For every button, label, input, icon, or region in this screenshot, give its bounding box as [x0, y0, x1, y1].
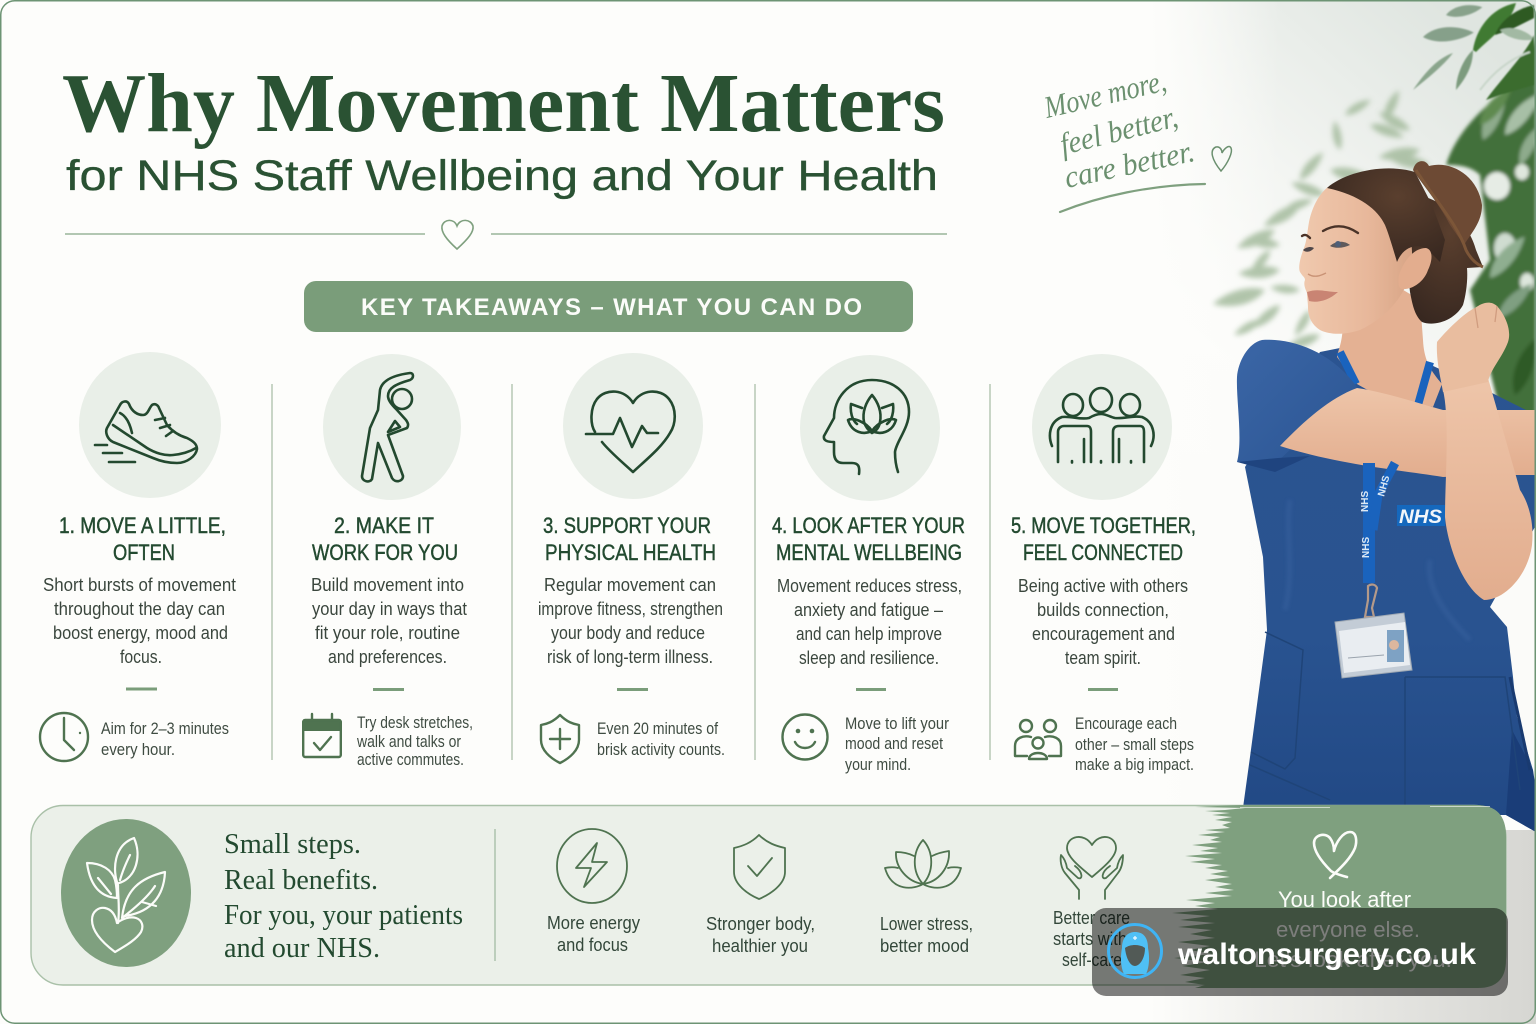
- body text: throughout the day can: [54, 599, 225, 619]
- heading: 4. LOOK AFTER YOUR: [772, 513, 965, 538]
- body text: team spirit.: [1065, 648, 1141, 668]
- tip text: Try desk stretches,: [357, 714, 473, 732]
- benefit: better care: starts with: [1053, 929, 1127, 949]
- lower lanyard and NHS strap text: NHS: [1376, 474, 1392, 498]
- tip text: Move to lift your: [845, 715, 949, 733]
- icon: heart growing leaves: [61, 819, 191, 967]
- icon: head with lotus: [800, 355, 940, 501]
- tip text: [101, 720, 229, 759]
- heading: [312, 513, 458, 565]
- tip text: [845, 715, 949, 774]
- photo background: soft wash and plants: [1150, 0, 1536, 810]
- NHS chest logo: NHS: [1399, 507, 1442, 528]
- icon: stretching figure: [323, 354, 461, 500]
- heading: MENTAL WELLBEING: [776, 540, 962, 565]
- heading: OFTEN: [113, 540, 175, 565]
- heading: FEEL CONNECTED: [1023, 540, 1183, 565]
- tip text: active commutes.: [357, 751, 464, 769]
- bottom-right grey wash: [1150, 830, 1536, 1024]
- body text: Regular movement can: [544, 575, 716, 595]
- title: Why Movement Matters: [62, 57, 945, 150]
- body text: improve fitness, strengthen: [538, 599, 723, 619]
- watermark badge: [1092, 908, 1508, 996]
- icon: heart with pulse: [563, 353, 703, 499]
- body text: focus.: [120, 647, 162, 667]
- benefit: lower stress: Lower stress,: [880, 914, 973, 934]
- benefit: stronger body: healthier you: [712, 936, 808, 956]
- panel: takeaway 2: [303, 354, 473, 769]
- tagline: Real benefits.: [224, 864, 378, 896]
- panel: takeaway 3: [538, 353, 725, 763]
- icon: calendar: [303, 714, 341, 757]
- ID badge and clip: [1335, 585, 1412, 678]
- hair back and bun: [1400, 195, 1483, 324]
- panel: takeaway 5: [1011, 354, 1196, 774]
- subtitle: for NHS Staff Wellbeing and Your Health: [66, 153, 938, 200]
- panel: takeaway 4: [772, 355, 965, 774]
- benefit: better care: [1053, 837, 1130, 970]
- icon: supportive group: [1015, 720, 1061, 759]
- body text: Short bursts of movement: [43, 575, 236, 595]
- body text: [1018, 576, 1188, 668]
- body text: [43, 575, 236, 667]
- body text: Movement reduces stress,: [777, 576, 962, 596]
- neck: [1337, 285, 1442, 407]
- benefit: better care: Better care: [1053, 908, 1130, 928]
- banner: key takeaways: [304, 281, 913, 332]
- ear: [1398, 248, 1432, 289]
- icon: three people: [1032, 354, 1172, 500]
- lower lanyard and NHS strap text: NHS: [1361, 537, 1372, 558]
- heading: [1011, 513, 1196, 565]
- tip text: [597, 720, 725, 759]
- handwritten note: care better.: [1061, 133, 1198, 195]
- body text: your day in ways that: [312, 599, 467, 619]
- tip text: Even 20 minutes of: [597, 720, 718, 738]
- column dividers: [272, 384, 990, 760]
- body text: and can help improve: [796, 624, 942, 644]
- benefit: lower stress: better mood: [880, 936, 969, 956]
- tip text: make a big impact.: [1075, 756, 1194, 774]
- body text: Build movement into: [311, 575, 464, 595]
- hair front and bun: [1327, 168, 1445, 262]
- brush panel: you look after everyone else: everyone else.: [1276, 917, 1420, 942]
- benefit: stronger body: Stronger body,: [706, 914, 815, 934]
- benefit: lower stress: [880, 840, 973, 956]
- lower lanyard and NHS strap text: NHS: [1360, 491, 1371, 512]
- handwritten note: Move more,: [1040, 63, 1169, 125]
- handwritten note: [1040, 63, 1231, 212]
- heading: 3. SUPPORT YOUR: [543, 513, 711, 538]
- forearm and elbow: [1443, 378, 1532, 600]
- brush panel: you look after everyone else: [1172, 805, 1506, 988]
- heading: [543, 513, 716, 565]
- body text: encouragement and: [1032, 624, 1175, 644]
- body text: your body and reduce: [551, 623, 705, 643]
- body text: sleep and resilience.: [799, 648, 939, 668]
- body text: risk of long-term illness.: [547, 647, 713, 667]
- photo: nurse stretching: [1237, 161, 1536, 832]
- tip text: mood and reset: [845, 735, 943, 753]
- raised-side sleeve: [1237, 340, 1357, 462]
- tip text: other – small steps: [1075, 736, 1194, 754]
- icon: shield with plus: [541, 715, 579, 763]
- tip text: [356, 714, 473, 769]
- heading: 5. MOVE TOGETHER,: [1011, 513, 1196, 538]
- benefit: better care: self-care: [1062, 950, 1122, 970]
- tip text: walk and talks or: [356, 733, 461, 751]
- heading: 1. MOVE A LITTLE,: [59, 513, 226, 538]
- brush panel: you look after everyone else: Let's look after you.: [1254, 947, 1452, 972]
- facial features: [1302, 226, 1358, 302]
- tip text: Encourage each: [1075, 715, 1177, 733]
- benefit: energy: More energy: [547, 913, 640, 933]
- heading: WORK FOR YOU: [312, 540, 458, 565]
- title divider with heart: [65, 220, 947, 249]
- icon: running shoe: [79, 352, 221, 498]
- panel: takeaway 1: [40, 352, 236, 761]
- heading: [59, 513, 226, 565]
- near leaves: [1446, 40, 1536, 420]
- tip text: brisk activity counts.: [597, 741, 725, 759]
- icon: nurse logo: [1108, 924, 1162, 978]
- tagline: and our NHS.: [224, 932, 380, 964]
- benefit: energy: and focus: [557, 935, 628, 955]
- tagline: [224, 828, 463, 964]
- body text: [777, 576, 962, 668]
- body text: [538, 575, 723, 667]
- heading: [772, 513, 965, 565]
- benefit: energy: [547, 829, 640, 955]
- heading: PHYSICAL HEALTH: [545, 540, 716, 565]
- lanyard at neck: [1340, 352, 1430, 405]
- handwritten note: feel better,: [1056, 99, 1181, 162]
- lower lanyard and NHS strap text: [1360, 463, 1395, 583]
- body text: fit your role, routine: [315, 623, 460, 643]
- tip text: Aim for 2–3 minutes: [101, 720, 229, 738]
- panel: benefits bar: [31, 805, 1506, 988]
- horizontal arm: [1280, 388, 1536, 477]
- body text: Being active with others: [1018, 576, 1188, 596]
- fist: [1437, 303, 1509, 392]
- body text: and preferences.: [328, 647, 447, 667]
- shirt torso: [1242, 348, 1536, 832]
- icon: smiley: [782, 714, 828, 760]
- body text: [311, 575, 467, 667]
- far blurred branch: [1211, 88, 1431, 353]
- watermark badge: waltonsurgery.co.uk: [1177, 938, 1476, 971]
- body text: anxiety and fatigue –: [794, 600, 943, 620]
- banner: key takeaways: KEY TAKEAWAYS – WHAT YOU CAN DO: [361, 294, 862, 321]
- tagline: For you, your patients: [224, 899, 463, 931]
- tip text: every hour.: [101, 741, 175, 759]
- tagline: Small steps.: [224, 828, 361, 860]
- tip text: [1075, 715, 1194, 774]
- icon: clock: [40, 713, 88, 761]
- benefit: stronger body: [706, 835, 815, 956]
- body text: builds connection,: [1037, 600, 1169, 620]
- tip text: your mind.: [845, 756, 911, 774]
- face and head: [1299, 181, 1412, 334]
- brush panel: you look after everyone else: You look after: [1278, 887, 1411, 912]
- heading: 2. MAKE IT: [334, 513, 434, 538]
- body text: boost energy, mood and: [53, 623, 228, 643]
